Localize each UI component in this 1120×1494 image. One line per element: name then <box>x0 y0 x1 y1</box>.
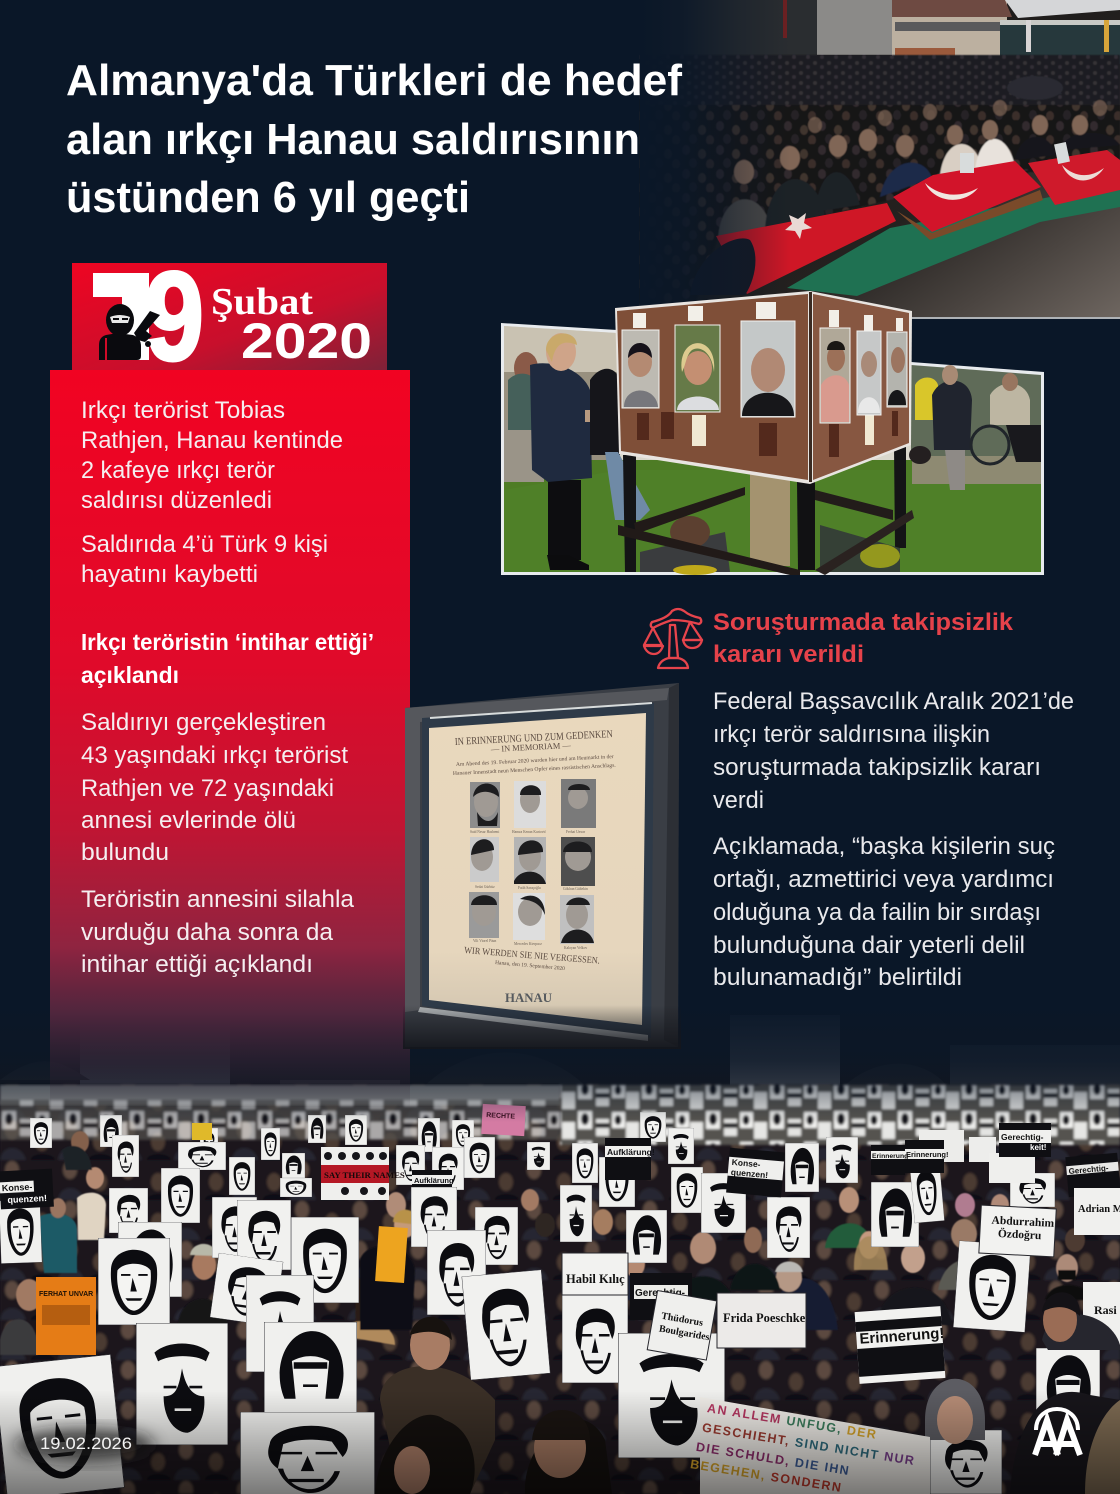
text: attacker found dead: annesi evlerinde ölü <box>81 807 296 834</box>
title: alan ırkçı Hanau saldırısının <box>66 115 640 164</box>
text placards: Habil Kılıç <box>566 1272 625 1286</box>
man in navy jacket <box>530 333 605 570</box>
text: attacker found dead: vurduğu daha sonra da <box>81 919 334 946</box>
heading: non-prosecution decision: Soruşturmada takipsizlik <box>713 609 1014 636</box>
text placards <box>0 1104 1120 1384</box>
date header: 19 Şubat 2020 <box>72 263 387 370</box>
victim portraits: Ferhat Unvar <box>566 830 586 834</box>
text: prosecutor statement: verdi <box>713 787 764 814</box>
text placards: Boulgarides <box>658 1323 710 1343</box>
text: prosecutor statement <box>713 688 1074 991</box>
photo: crowd with portrait placards <box>0 1000 1120 1494</box>
victim portraits: Vili Viorel Păun <box>473 939 496 943</box>
text: attacker found dead: Teröristin annesini silahla <box>81 886 355 913</box>
banner with multicolour quote: BEGEHEN, SONDERN <box>689 1457 843 1494</box>
text placards: Özdoğru <box>998 1226 1042 1242</box>
plaque inscription: Hanau, den 19. September 2020 <box>495 960 565 972</box>
title <box>66 56 682 222</box>
text placards: Abdurrahim <box>991 1215 1055 1230</box>
text placards: Erinnerung! <box>906 1150 948 1159</box>
heading: non-prosecution decision <box>713 609 1014 668</box>
date stamp: 19.02.2026 <box>40 1435 132 1453</box>
subheading: suicide announced <box>81 629 374 688</box>
text placards: FERHAT UNVAR <box>39 1291 93 1298</box>
text placards: quenzen! <box>7 1193 47 1205</box>
text: attack description: saldırısı düzenledi <box>81 487 272 514</box>
photo: funeral with flag-draped coffins <box>640 0 1120 319</box>
text placards: Aufklärung! <box>607 1147 655 1157</box>
text placards: Gerechtig- <box>1001 1132 1044 1142</box>
subheading: suicide announced: açıklandı <box>81 662 179 688</box>
text placards: Erinnerung <box>872 1153 908 1160</box>
text placards: Erinnerung! <box>859 1325 945 1348</box>
plaque inscription: IN ERINNERUNG UND ZUM GEDENKEN <box>455 729 613 748</box>
text: attacker found dead: Saldırıyı gerçekleştiren <box>81 709 326 736</box>
logo: Anadolu Agency <box>1035 1409 1080 1455</box>
text: attacker found dead: intihar ettiği açıklandı <box>81 951 313 978</box>
text placards: Konse- <box>2 1182 33 1193</box>
text placards: keit! <box>1030 1143 1046 1152</box>
panel: attack summary <box>50 370 410 1110</box>
text: attack description: 2 kafeye ırkçı terör <box>81 457 275 484</box>
far placards <box>30 1112 1055 1263</box>
text: prosecutor statement: ırkçı terör saldırısına ilişkin <box>713 721 990 748</box>
plaque inscription: WIR WERDEN SIE NIE VERGESSEN. <box>464 946 600 967</box>
icon: scales of justice <box>644 609 702 668</box>
text: attacker found dead: 43 yaşındaki ırkçı terörist <box>81 742 348 769</box>
victim portraits: Mercedes Kierpacz <box>514 942 542 946</box>
plaque inscription <box>453 729 617 1005</box>
wooden board <box>615 291 914 575</box>
foreground figures <box>375 1292 1120 1494</box>
text: attacker found dead <box>81 709 355 978</box>
text: prosecutor statement: Açıklamada, “başka kişilerin suç <box>713 833 1055 860</box>
text: attack description: Saldırıda 4’ü Türk 9 kişi <box>81 531 328 558</box>
text placards: Konse- <box>731 1157 761 1169</box>
text: attacker found dead: bulundu <box>81 839 169 866</box>
victim portraits: Said Nesar Hashemi <box>470 830 499 834</box>
text placards: Aufklärung <box>414 1176 454 1185</box>
photo: memorial board with portraits in a park <box>501 291 1044 575</box>
heading: non-prosecution decision: kararı verildi <box>713 641 864 668</box>
subheading: suicide announced: Irkçı teröristin ‘intihar ettiği’ <box>81 629 374 655</box>
victim portraits: Sedat Gürbüz <box>475 885 495 889</box>
victim portraits: Kaloyan Velkov <box>564 946 587 950</box>
victim portraits: Fatih Saraçoğlu <box>518 886 541 890</box>
text: attack description: hayatını kaybetti <box>81 561 258 588</box>
people on the right <box>909 365 1041 490</box>
plaque inscription: Hanauer Innenstadt neun Menschen Opfer eines rassistischen Anschlags. <box>453 762 617 777</box>
text: prosecutor statement: olduğuna ya da failin bir sırdaşı <box>713 899 1041 926</box>
text: prosecutor statement: Federal Başsavcılık Aralık 2021’de <box>713 688 1074 715</box>
banner with multicolour quote <box>689 1397 930 1494</box>
plaque inscription: Am Abend des 19. Februar 2020 wurden hier und am Heumarkt in der <box>456 754 614 768</box>
text placards: SAY THEIR NAMES <box>324 1170 405 1180</box>
title: üstünden 6 yıl geçti <box>66 173 470 222</box>
plaque inscription: — IN MEMORIAM — <box>490 740 571 754</box>
large placards <box>0 1168 1100 1494</box>
date header: 19 Şubat 2020: Şubat <box>211 281 313 323</box>
text placards: Gerechtig- <box>635 1288 685 1299</box>
portrait posters <box>622 321 907 423</box>
text: attack description: Irkçı terörist Tobias <box>81 397 285 424</box>
banner with multicolour quote: GESCHIEHT, SIND NICHT NUR <box>701 1421 916 1468</box>
text: prosecutor statement: soruşturmada takipsizlik kararı <box>713 754 1041 781</box>
victim portraits: Hamza Kenan Kurtović <box>512 830 547 834</box>
plaque inscription: HANAU <box>505 990 553 1005</box>
icon: masked attacker with gun <box>99 304 160 360</box>
banner with multicolour quote: DIE SCHULD, DIE IHN <box>695 1440 851 1478</box>
victim portraits: Gökhan Gültekin <box>563 887 588 891</box>
date header: 19 Şubat 2020: 19 <box>86 246 204 387</box>
banner with multicolour quote: AN ALLEM UNFUG, DER <box>706 1401 878 1442</box>
text: prosecutor statement: bulunduğuna dair yeterli delil <box>713 932 1025 959</box>
text: attack description <box>81 397 343 588</box>
victim portraits <box>469 779 596 950</box>
people in the crowd <box>0 1131 1095 1355</box>
text placards: Frida Poeschke <box>723 1311 806 1325</box>
text placards: Gerechtig- <box>1068 1164 1109 1176</box>
text: attack description: Rathjen, Hanau kentinde <box>81 427 343 454</box>
text placards: quenzen! <box>730 1167 769 1180</box>
date header: 19 Şubat 2020: 2020 <box>241 313 372 369</box>
text: attacker found dead: Rathjen ve 72 yaşındaki <box>81 775 334 802</box>
title: Almanya'da Türkleri de hedef <box>66 56 682 105</box>
memorial plaque <box>403 683 681 1049</box>
text placards: Rasi <box>1094 1303 1117 1317</box>
text placards: RECHTE <box>486 1112 515 1121</box>
text placards: Thüdorus <box>660 1311 704 1329</box>
text: prosecutor statement: ortağı, azmettirici veya yardımcı <box>713 866 1054 893</box>
text: prosecutor statement: bulunamadığı” belirtildi <box>713 964 962 991</box>
